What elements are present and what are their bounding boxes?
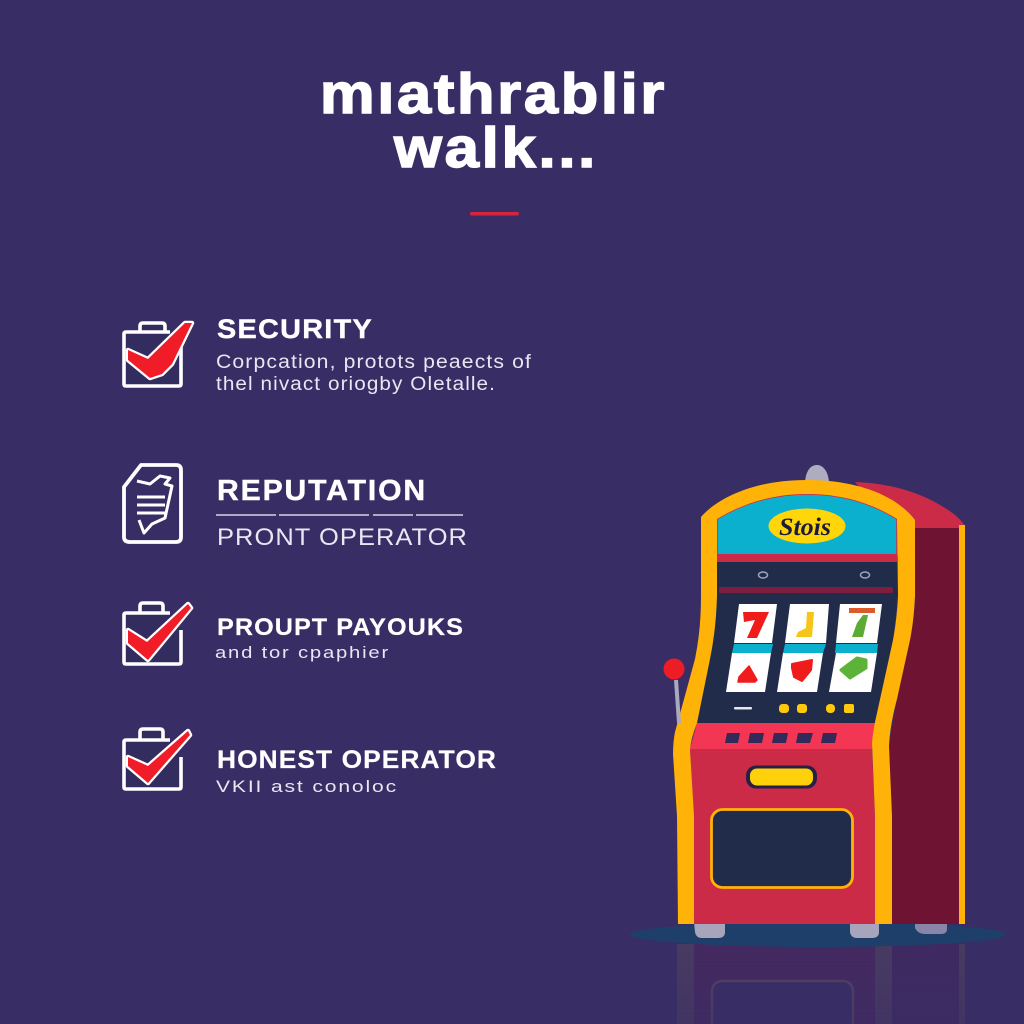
heading: honest operator: HONEST OPERATOR bbox=[217, 746, 497, 774]
top dome light bbox=[805, 465, 829, 482]
symbol: boot bbox=[796, 612, 814, 637]
panel: honest operator item bbox=[124, 729, 497, 796]
symbol: heart bbox=[792, 660, 812, 681]
heading: reputation: REPUTATION bbox=[217, 475, 427, 507]
keypad bbox=[725, 733, 837, 743]
heading: security: SECURITY bbox=[217, 314, 373, 344]
yellow frame bbox=[673, 480, 915, 924]
icon: clipboard check bbox=[124, 729, 190, 789]
dark screen panel bbox=[697, 555, 898, 723]
cabinet side bbox=[855, 482, 965, 924]
description: security: thel nivact oriogby Oletalle. bbox=[216, 374, 496, 395]
red strip bbox=[717, 554, 897, 562]
symbol: green figure bbox=[849, 608, 875, 637]
title accent line bbox=[470, 212, 519, 216]
screen buttons bbox=[734, 704, 854, 713]
coin slot bbox=[746, 766, 817, 788]
reel cards bbox=[726, 604, 882, 692]
teal payline bbox=[732, 644, 878, 653]
description: security bbox=[216, 352, 532, 395]
symbol: spade bbox=[738, 666, 757, 682]
panel: prompt payouts item bbox=[124, 603, 464, 664]
symbol: seven bbox=[743, 612, 769, 638]
logo badge bbox=[768, 508, 846, 544]
reels bbox=[726, 604, 882, 692]
title bbox=[320, 62, 667, 180]
machine feet bbox=[694, 922, 947, 938]
icon: clipboard check bbox=[124, 603, 191, 664]
payout tray bbox=[712, 810, 852, 888]
upper deck bbox=[690, 723, 877, 749]
panel: reputation item bbox=[124, 465, 468, 551]
teal marquee bbox=[717, 494, 897, 555]
floor reflection bbox=[677, 944, 965, 1024]
lever bbox=[664, 658, 684, 723]
description: reputation: PRONT OPERATOR bbox=[217, 524, 468, 551]
cabinet body bbox=[690, 723, 877, 924]
description: prompt payouts: and tor cpaphier bbox=[215, 643, 390, 662]
panel: security item bbox=[124, 314, 532, 395]
logo badge: Stois bbox=[779, 514, 831, 541]
screws bbox=[758, 572, 870, 578]
description: security: Corpcation, protots peaects of bbox=[216, 352, 532, 373]
illustration: slot machine bbox=[664, 465, 965, 938]
heading: prompt payouts: PROUPT PAYOUKS bbox=[217, 614, 464, 641]
description: honest operator: VKII ast conoloc bbox=[216, 777, 398, 796]
symbol: green blob bbox=[841, 658, 866, 678]
icon: document bbox=[124, 465, 181, 542]
title: walk... bbox=[393, 116, 598, 180]
floor shadow ellipse bbox=[630, 922, 1006, 947]
title: mıathrablir bbox=[320, 62, 667, 126]
maroon strip bbox=[719, 587, 893, 593]
icon: clipboard check bbox=[124, 323, 192, 386]
